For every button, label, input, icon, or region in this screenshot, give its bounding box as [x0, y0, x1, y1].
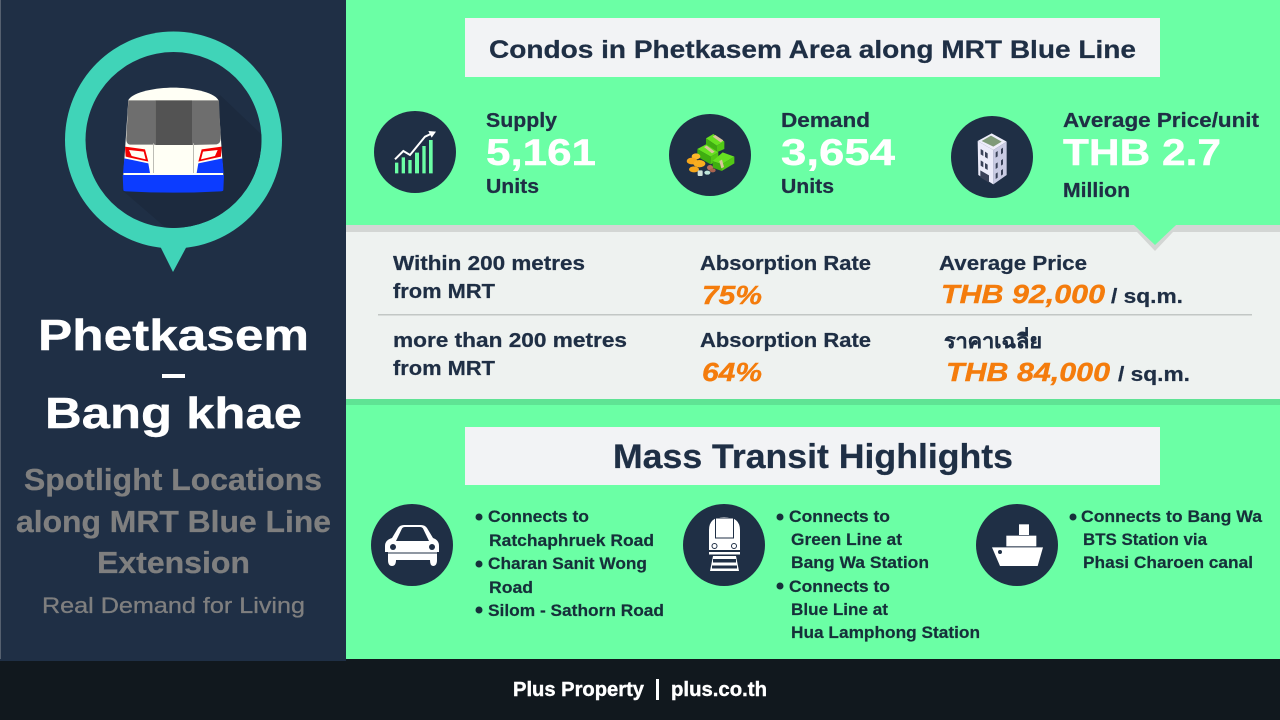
heading: Phetkasem – Bang khae: Phetkasem: [38, 311, 309, 360]
row: within 200 metres: Average Price: [939, 253, 1087, 275]
icon: building: [951, 116, 1033, 198]
list: rail connections: Green Line at: [791, 530, 902, 549]
row: more than 200 metres: / sq.m.: [1118, 364, 1190, 386]
list: boat connection: BTS Station via: [1083, 530, 1208, 549]
stat: supply: [374, 110, 596, 198]
text: demand figures: Units: [781, 176, 834, 198]
row: within 200 metres: THB 92,000: [941, 279, 1106, 309]
text: price figures: [1063, 110, 1259, 202]
row: within 200 metres: from MRT: [393, 281, 495, 303]
list: rail connections: [776, 507, 980, 642]
stat: demand: [669, 110, 896, 198]
text: demand figures: 3,654: [781, 132, 896, 173]
text: price figures: THB 2.7: [1063, 132, 1221, 173]
list: road connections: Road: [489, 578, 533, 597]
text: supply figures: [486, 110, 596, 198]
heading: Phetkasem – Bang khae: [38, 311, 309, 438]
row: within 200 metres: [393, 253, 1183, 310]
footer: [0, 659, 1280, 720]
list: road connections: Silom - Sathorn Road: [488, 601, 664, 620]
stat: average price per unit: [951, 110, 1259, 202]
icon: growth chart: [374, 111, 456, 193]
row: more than 200 metres: 64%: [702, 357, 762, 387]
footer: Plus Property: [513, 679, 645, 701]
row: more than 200 metres: more than 200 metres: [393, 330, 627, 352]
row: more than 200 metres: ราคาเฉลี่ย: [944, 326, 1042, 353]
text block: subtitle: Real Demand for Living: [42, 593, 305, 618]
panel: left sidebar: [0, 0, 346, 661]
text block: subtitle: along MRT Blue Line: [16, 504, 331, 539]
list: road connections: [476, 507, 664, 620]
list: rail connections: Hua Lamphong Station: [791, 623, 980, 642]
text: demand figures: [781, 110, 896, 198]
icon: train on tracks: [683, 504, 765, 586]
list: road connections: Connects to: [488, 507, 589, 526]
footer: plus.co.th: [671, 679, 767, 701]
panel: main title: Condos in Phetkasem Area along MRT Blue Line: [489, 36, 1136, 64]
row: more than 200 metres: [393, 326, 1190, 387]
text: price figures: Million: [1063, 180, 1130, 202]
text: supply figures: Supply: [486, 110, 558, 132]
icon: money pile: [669, 114, 751, 196]
list: rail connections: Connects to: [789, 577, 890, 596]
list: rail connections: Blue Line at: [791, 600, 888, 619]
icon: location pin with train: [65, 32, 282, 272]
row: within 200 metres: Within 200 metres: [393, 253, 585, 275]
highlight: rail: [683, 504, 980, 642]
heading: Phetkasem – Bang khae: Bang khae: [45, 389, 302, 438]
list: road connections: Ratchaphruek Road: [489, 531, 654, 550]
list: boat connection: Connects to Bang Wa: [1081, 507, 1263, 526]
row: more than 200 metres: from MRT: [393, 358, 495, 380]
text: supply figures: Units: [486, 176, 539, 198]
highlight: boat: [976, 504, 1263, 586]
text: supply figures: 5,161: [486, 132, 596, 173]
text: price figures: Average Price/unit: [1063, 110, 1259, 132]
panel: main title: [465, 18, 1160, 77]
list: boat connection: Phasi Charoen canal: [1083, 553, 1253, 572]
row: within 200 metres: 75%: [702, 280, 762, 310]
list: boat connection: [1070, 507, 1263, 572]
row: within 200 metres: / sq.m.: [1111, 286, 1183, 308]
row: within 200 metres: Absorption Rate: [700, 253, 871, 275]
icon: ship: [976, 504, 1058, 586]
panel: mass transit heading: Mass Transit Highlights: [613, 438, 1013, 476]
text: demand figures: Demand: [781, 110, 870, 132]
icon: car: [371, 504, 453, 586]
text block: subtitle: Extension: [97, 545, 250, 580]
text block: subtitle: Spotlight Locations: [24, 462, 322, 497]
row: more than 200 metres: Absorption Rate: [700, 330, 871, 352]
list: rail connections: Connects to: [789, 507, 890, 526]
panel: absorption table: [346, 225, 1280, 405]
panel: mass transit heading: [465, 427, 1160, 485]
row: more than 200 metres: THB 84,000: [946, 357, 1111, 387]
list: rail connections: Bang Wa Station: [791, 553, 929, 572]
highlight: roads: [371, 504, 664, 620]
text block: subtitle: [16, 462, 331, 618]
list: road connections: Charan Sanit Wong: [488, 554, 647, 573]
